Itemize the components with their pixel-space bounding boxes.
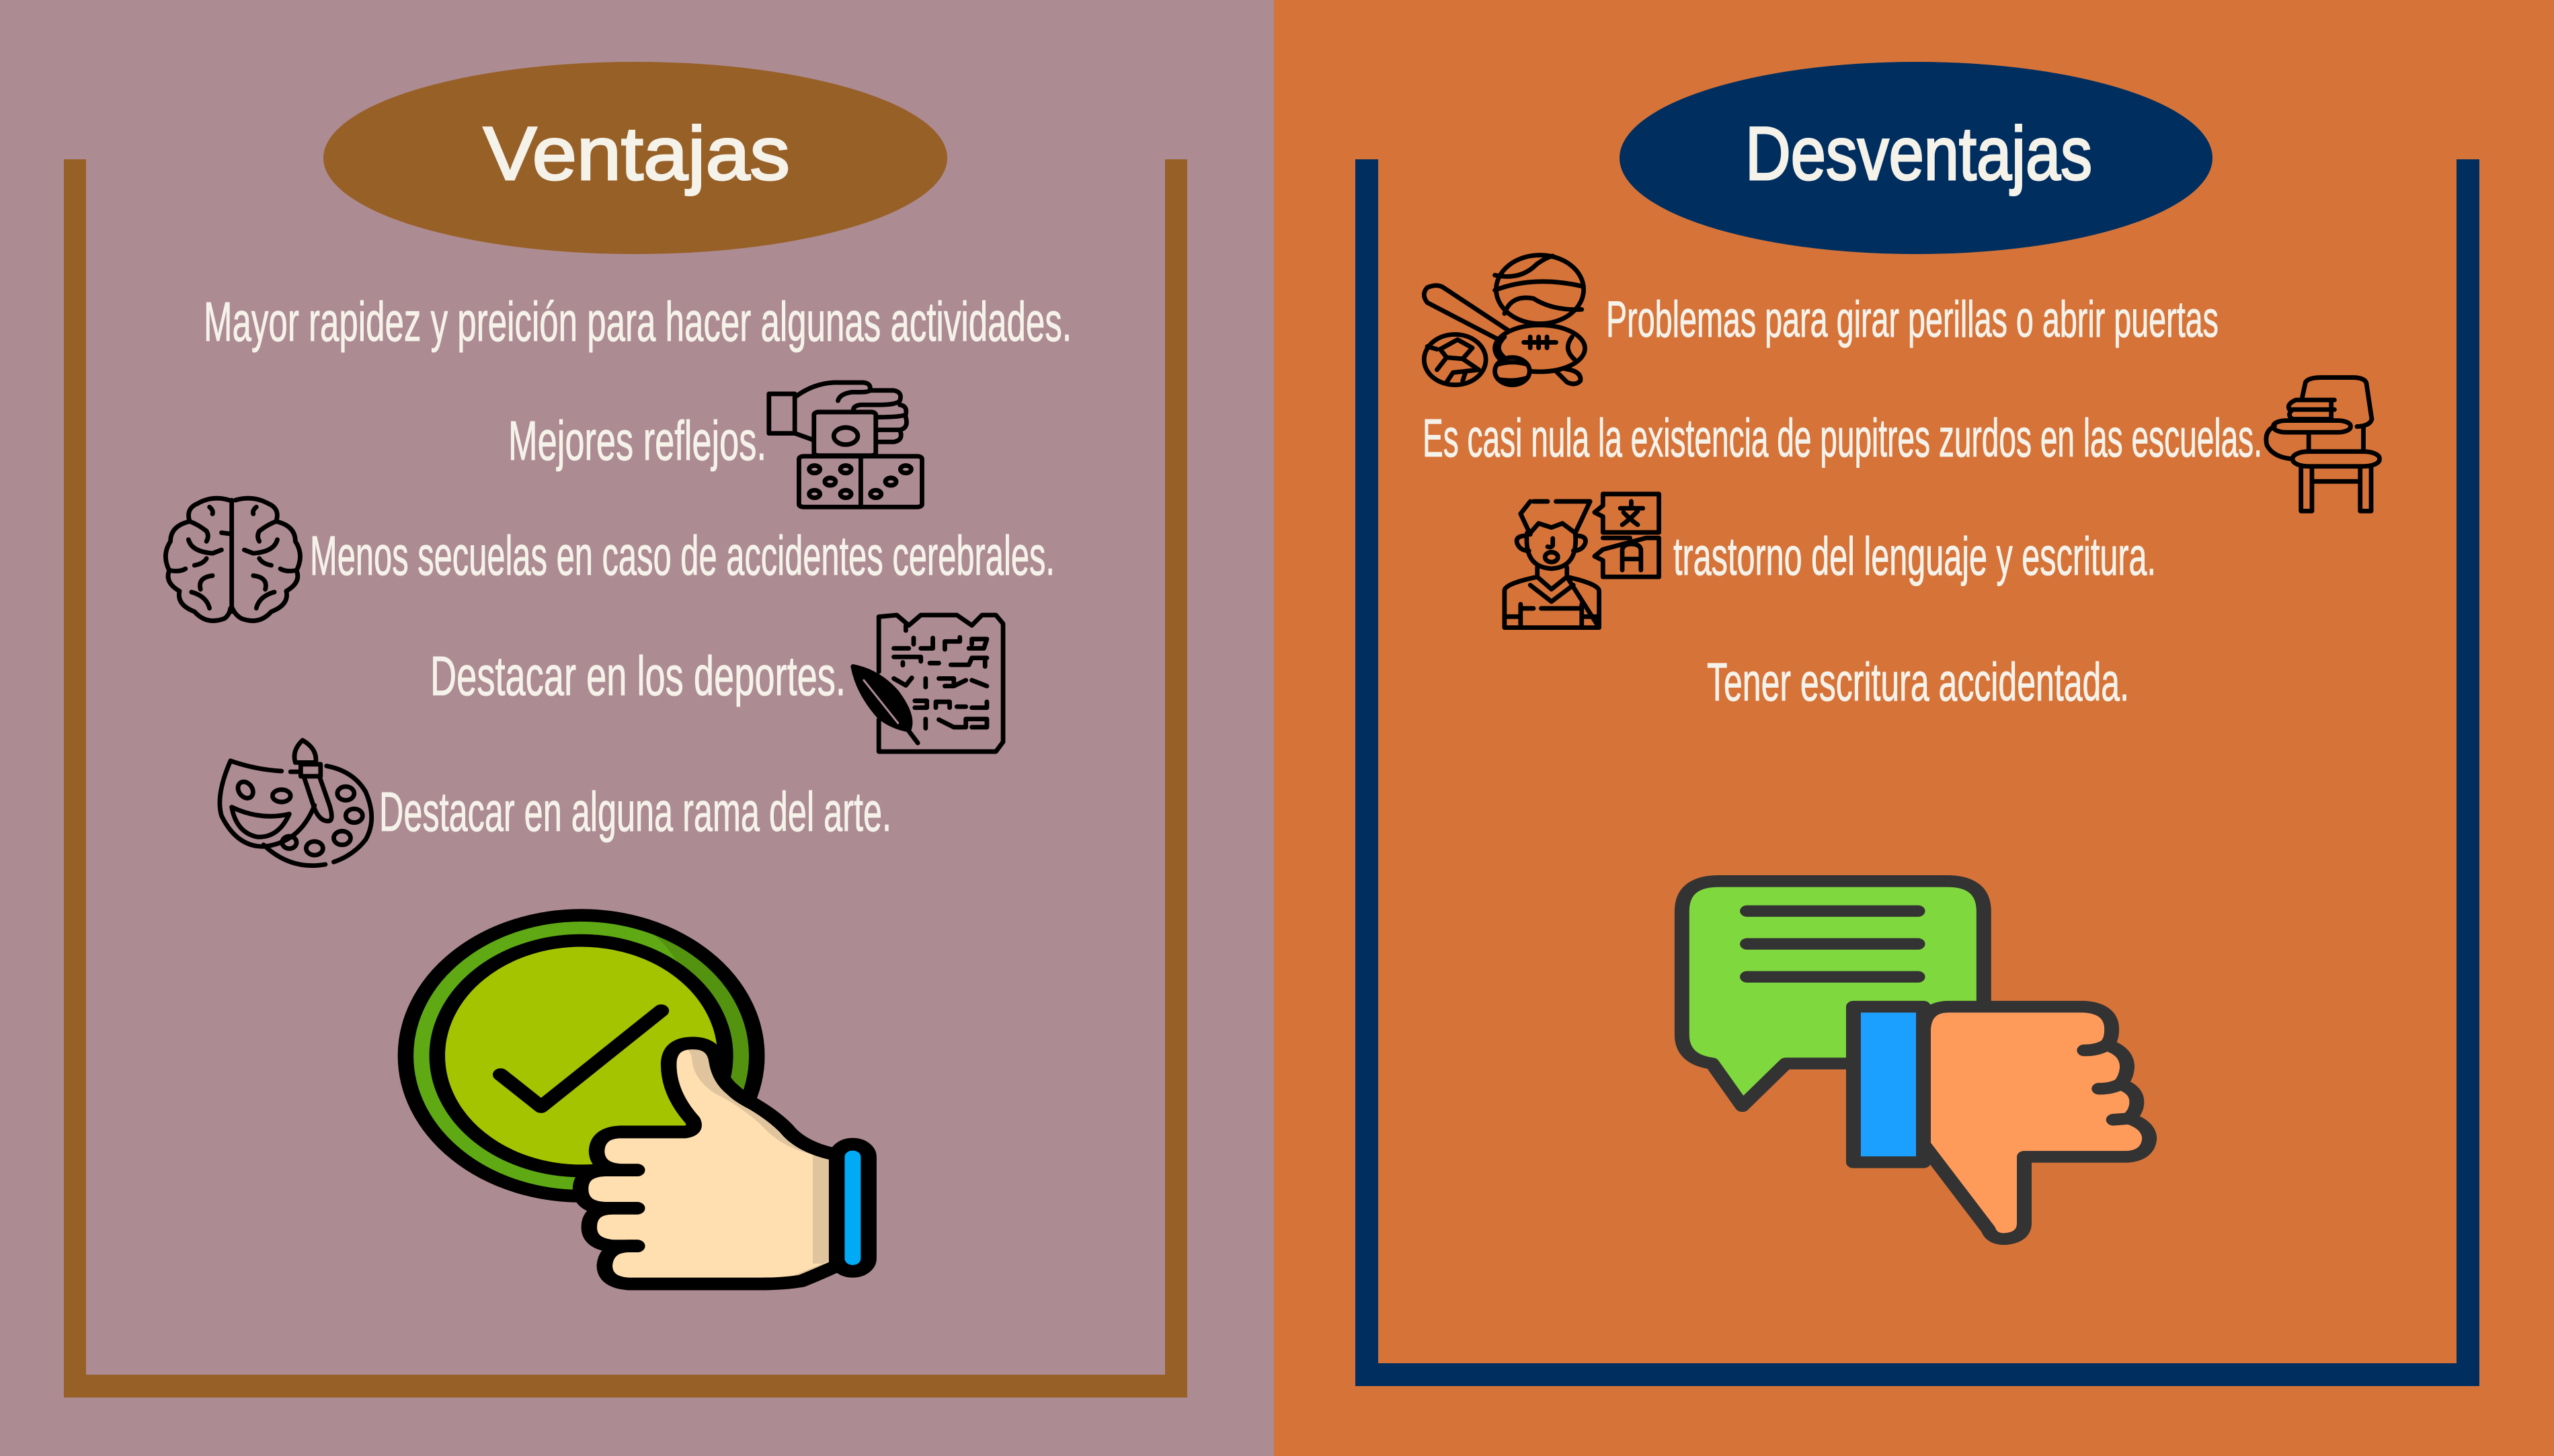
icon: person speaking languages [1505, 494, 1659, 628]
text: arte: Destacar en alguna rama del arte. [379, 780, 891, 843]
icon: thumbs up with check mark [405, 916, 869, 1284]
text: rapidez: Mayor rapidez y preición para hacer algunas actividades. [204, 290, 1072, 353]
badge [405, 916, 757, 1196]
navy frame [1355, 159, 2479, 1386]
icon: theatre mask and palette [220, 740, 372, 866]
heading: Desventajas [1620, 62, 2212, 254]
hand [1923, 1007, 2149, 1239]
text: deportes: Destacar en los deportes. [430, 645, 846, 707]
cuff [1853, 1007, 1923, 1162]
icon: scroll and quill [853, 615, 1003, 752]
text: escritura: Tener escritura accidentada. [1707, 652, 2129, 712]
hand [581, 1043, 837, 1284]
cuff [837, 1144, 869, 1271]
text: reflejos: Mejores reflejos. [508, 409, 766, 472]
panel background: ventajas [0, 0, 1274, 1456]
heading: Ventajas [323, 62, 947, 254]
brown frame [64, 159, 1187, 1398]
panel: desventajas [1274, 0, 2554, 1456]
panel: ventajas [0, 0, 1274, 1456]
text: accidentes: Menos secuelas en caso de accidentes cerebrales. [310, 524, 1055, 587]
icon: hand with dice [769, 382, 922, 507]
panel background: desventajas [1274, 0, 2554, 1456]
heading: Ventajas: Ventajas [483, 112, 790, 196]
check mark [501, 1011, 661, 1106]
icon: school desk [2266, 378, 2379, 511]
icon: sports equipment [1424, 255, 1585, 385]
text: lenguaje: trastorno del lenguaje y escritura. [1673, 526, 2156, 586]
icon: brain [165, 498, 300, 621]
speech bubble [1682, 881, 1984, 1106]
icon: speech bubble and thumbs down [1682, 881, 2149, 1239]
heading: Desventajas: Desventajas [1745, 112, 2092, 196]
